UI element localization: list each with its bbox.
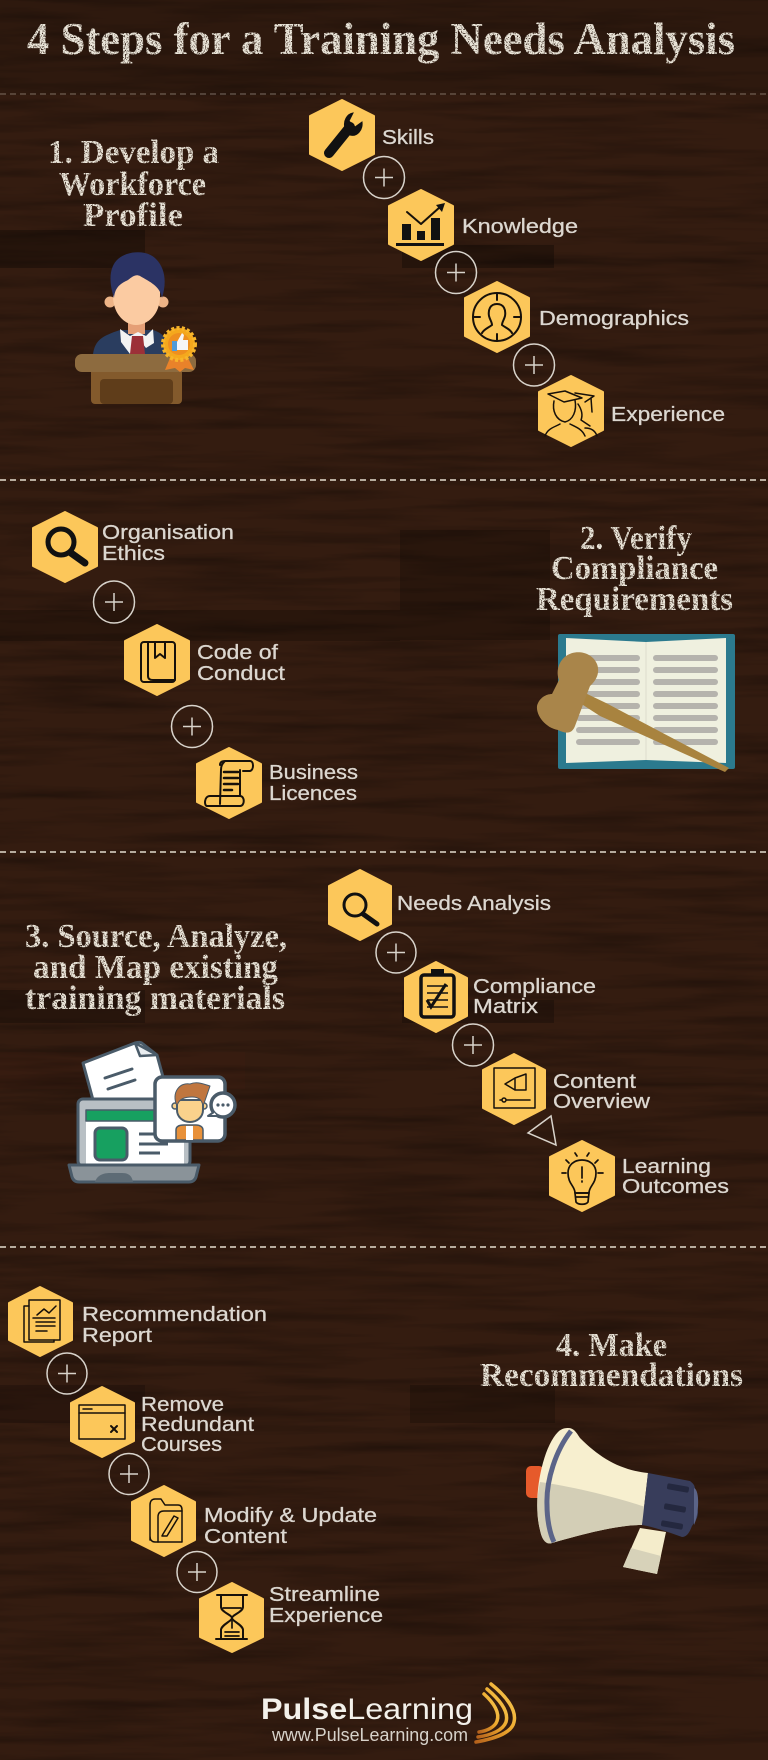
panel: step 4 make recommendations bbox=[9, 1287, 743, 1652]
item: needs analysis bbox=[329, 870, 551, 940]
logo: PulseLearning: www.PulseLearning.com bbox=[271, 1725, 468, 1745]
item: remove redundant courses: Courses bbox=[141, 1433, 222, 1456]
illustration: book and gavel bbox=[537, 634, 735, 772]
item: content overview: Overview bbox=[553, 1090, 650, 1113]
item: streamline experience bbox=[200, 1583, 383, 1652]
connector: plus 10 bbox=[177, 1552, 217, 1592]
logo: PulseLearning: PulseLearning bbox=[261, 1693, 473, 1726]
heading: step 1: 1. Develop a bbox=[48, 134, 219, 171]
item: compliance matrix: Matrix bbox=[473, 995, 539, 1018]
item: recommendation report bbox=[9, 1287, 267, 1356]
item: demographics bbox=[465, 282, 689, 352]
item: remove redundant courses bbox=[71, 1387, 254, 1457]
item: code of conduct bbox=[125, 625, 285, 695]
item: recommendation report: Recommendation bbox=[82, 1303, 267, 1326]
panel: step 2 compliance requirements bbox=[33, 512, 735, 818]
connector: plus 3 bbox=[514, 344, 554, 386]
panel: step 1 workforce profile bbox=[48, 100, 725, 446]
heading: step 4: Recommendations bbox=[480, 1357, 743, 1394]
connector: plus 6 bbox=[376, 932, 416, 973]
item: code of conduct: Code of bbox=[197, 641, 278, 664]
item: knowledge: Knowledge bbox=[462, 215, 578, 238]
item: modify and update content bbox=[132, 1486, 377, 1556]
item: business licences: Licences bbox=[269, 782, 357, 805]
item: knowledge bbox=[389, 190, 578, 260]
item: organisation ethics bbox=[33, 512, 234, 582]
item: modify and update content: Modify & Update bbox=[204, 1504, 377, 1527]
connector: plus 1 bbox=[364, 156, 404, 198]
icon: magnifier bbox=[48, 529, 85, 563]
item: business licences bbox=[197, 748, 358, 818]
icon: slide with rewind bbox=[494, 1068, 535, 1108]
item: recommendation report: Report bbox=[82, 1324, 152, 1347]
icon: light bulb bbox=[562, 1153, 603, 1204]
icon: graduates bbox=[545, 391, 597, 436]
heading: step 2 bbox=[536, 520, 733, 618]
item: experience bbox=[539, 376, 725, 446]
item: needs analysis: Needs Analysis bbox=[397, 892, 551, 915]
connector: plus 2 bbox=[436, 252, 476, 294]
heading: step 3: training materials bbox=[25, 980, 285, 1017]
item: compliance matrix: Compliance bbox=[473, 975, 596, 998]
item: code of conduct: Conduct bbox=[197, 662, 285, 685]
item: content overview: Content bbox=[553, 1070, 636, 1093]
heading: step 3: 3. Source, Analyze, bbox=[25, 918, 287, 955]
item: business licences: Business bbox=[269, 761, 358, 784]
icon: magnifier bbox=[344, 894, 377, 924]
icon: report bbox=[24, 1300, 60, 1342]
item: modify and update content: Content bbox=[204, 1525, 287, 1548]
item: learning outcomes: Outcomes bbox=[622, 1175, 729, 1198]
item: experience: Experience bbox=[611, 403, 725, 426]
icon: closed book bbox=[141, 642, 175, 682]
connector: plus 7 bbox=[452, 1024, 494, 1066]
item: organisation ethics: Organisation bbox=[102, 521, 234, 544]
heading: step 2: Requirements bbox=[536, 581, 733, 618]
heading: step 4: 4. Make bbox=[556, 1327, 667, 1364]
icon: target person bbox=[473, 293, 521, 341]
icon: pulse swoosh bbox=[476, 1684, 514, 1742]
panel: step 3 source analyze map bbox=[25, 870, 729, 1211]
item: streamline experience: Experience bbox=[269, 1604, 383, 1627]
icon: browser window with x bbox=[79, 1405, 125, 1439]
item: demographics: Demographics bbox=[539, 307, 689, 330]
connector: triangle bbox=[528, 1116, 556, 1145]
heading: step 1 bbox=[48, 134, 219, 234]
heading: step 2: 2. Verify bbox=[580, 520, 692, 557]
item: organisation ethics: Ethics bbox=[102, 542, 165, 565]
connector: plus 4 bbox=[94, 581, 134, 623]
connector: plus 9 bbox=[109, 1454, 149, 1494]
heading: step 1: Workforce bbox=[59, 166, 206, 203]
item: skills: Skills bbox=[382, 126, 434, 149]
illustration: speaker at podium bbox=[75, 252, 196, 404]
icon: wrench bbox=[329, 113, 362, 153]
connector: plus 5 bbox=[172, 706, 212, 748]
icon: hourglass bbox=[216, 1595, 247, 1639]
icon: scroll bbox=[205, 761, 253, 806]
icon: folder and pencil bbox=[150, 1499, 182, 1542]
illustration: laptop with document and video call bbox=[69, 1042, 235, 1182]
item: streamline experience: Streamline bbox=[269, 1583, 380, 1606]
item: remove redundant courses: Redundant bbox=[141, 1413, 254, 1436]
item: remove redundant courses: Remove bbox=[141, 1393, 224, 1416]
heading: step 3: and Map existing bbox=[33, 949, 278, 986]
heading: step 1: Profile bbox=[83, 197, 183, 234]
title: 4 Steps for a Training Needs Analysis bbox=[27, 14, 735, 64]
illustration: megaphone bbox=[526, 1428, 698, 1574]
heading: step 2: Compliance bbox=[551, 550, 718, 587]
icon: growth chart bbox=[396, 203, 445, 246]
connector: plus 8 bbox=[47, 1353, 87, 1394]
logo: PulseLearning bbox=[261, 1684, 514, 1745]
heading: step 4 bbox=[480, 1327, 743, 1394]
item: compliance matrix bbox=[405, 962, 596, 1032]
icon: clipboard checklist bbox=[421, 969, 454, 1017]
item: learning outcomes: Learning bbox=[622, 1155, 711, 1178]
icon: award badge bbox=[163, 328, 195, 372]
item: skills bbox=[310, 100, 434, 170]
item: content overview bbox=[483, 1054, 650, 1124]
item: learning outcomes bbox=[550, 1141, 729, 1211]
heading: step 3 bbox=[25, 918, 287, 1017]
